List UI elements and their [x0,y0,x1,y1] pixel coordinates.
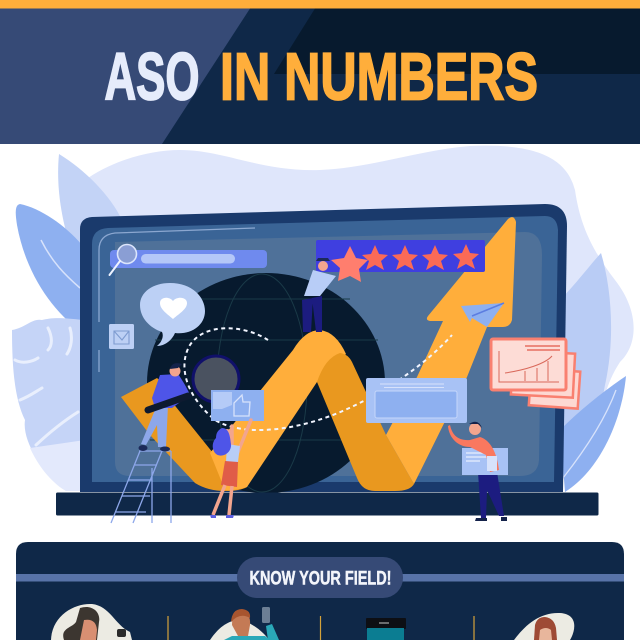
leaf: front right [560,376,626,492]
person: woman with phone [51,604,132,640]
search bar [110,244,267,275]
floating window card [366,378,467,423]
title: ASO [104,40,200,114]
icon: envelope tile [109,324,134,349]
title: IN NUMBERS [220,40,538,114]
leaf: back right [560,253,611,482]
panel: know your field [16,542,624,640]
background blob [88,146,634,480]
person: man with tablet [448,422,508,521]
big magnifier lens [193,356,239,402]
dotted path [184,328,452,430]
person: woman with red hair [514,613,574,640]
rating bar with stars [316,240,485,282]
ladder [111,451,171,523]
thumbs up card [211,390,264,421]
section heading pill [237,557,403,598]
icon: smartphone [366,618,406,640]
title [104,40,538,114]
laptop [80,204,567,492]
icon: paper plane [461,303,504,327]
growth ribbon arrow [121,217,516,491]
laptop base [56,492,598,516]
person: man with magnifier [138,363,190,452]
icon: magnifier [110,244,136,275]
header banner [0,0,640,144]
leaf: front left [16,204,82,332]
person: woman raising card [210,420,251,518]
person: man with phone [210,607,279,640]
leaf: back left [58,154,122,290]
globe [147,273,385,493]
speech bubble with heart [140,283,205,346]
section heading pill: KNOW YOUR FIELD! [250,568,392,590]
chart cards [491,339,580,409]
leaf: monstera left [12,318,85,491]
person: man placing star [302,258,336,332]
